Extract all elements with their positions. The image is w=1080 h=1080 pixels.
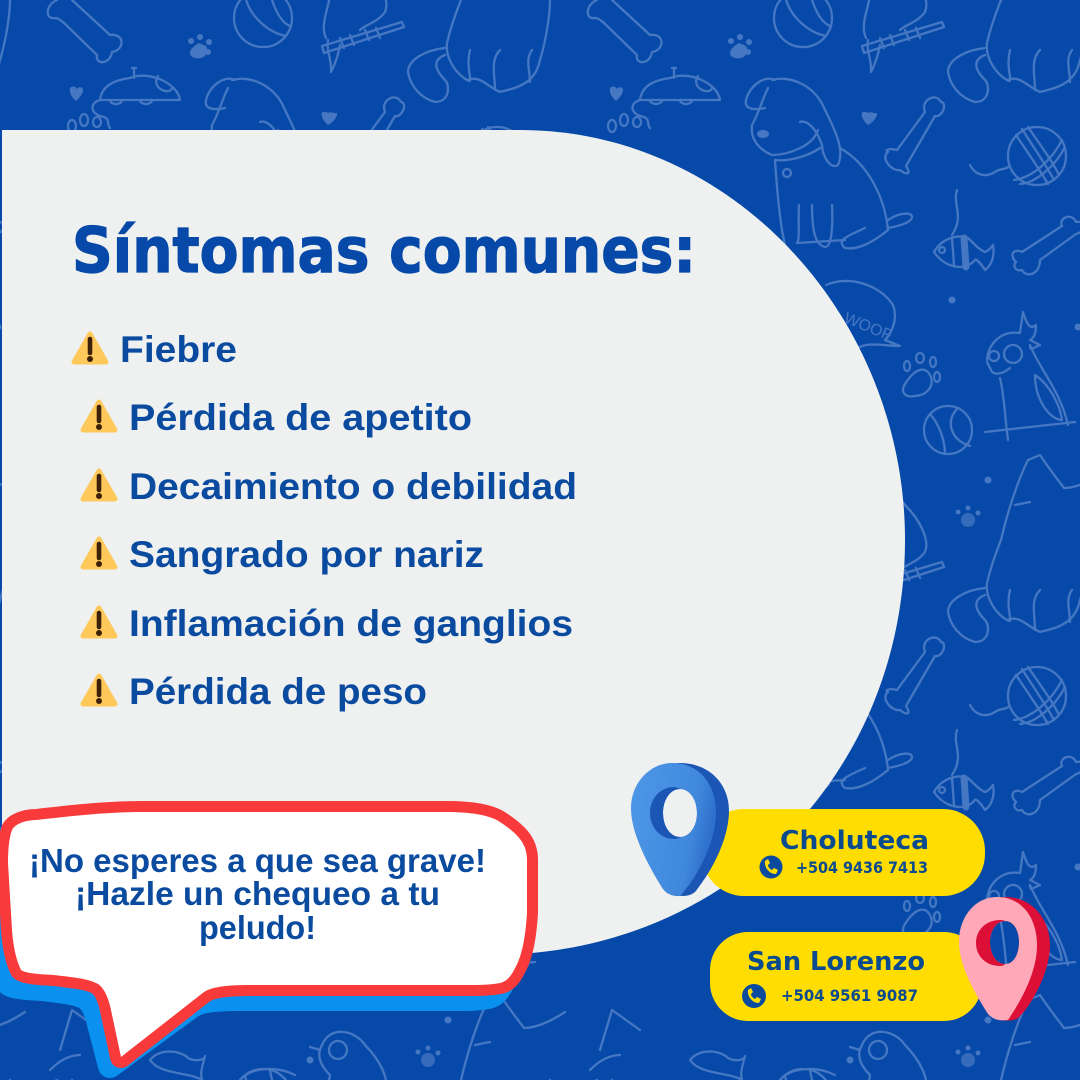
item: Fiebre: Fiebre [120,329,237,370]
icon: blue map pin [631,763,729,896]
contact pill: San Lorenzo: +504 9561 9087 [781,986,918,1005]
callout text [29,842,486,946]
contact pill: San Lorenzo [710,932,982,1021]
panel: symptoms card [2,130,905,955]
callout text: peludo! [199,909,316,946]
callout text: ¡No esperes a que sea grave! [29,842,486,879]
symptom list [74,329,577,712]
icon: phone [742,984,766,1008]
contact pill: San Lorenzo: San Lorenzo [747,947,925,977]
icon: phone [760,856,782,878]
item: Pérdida de apetito: Pérdida de apetito [129,397,472,438]
contact pill: Choluteca: +504 9436 7413 [796,858,928,877]
item: Sangrado por nariz: Sangrado por nariz [129,534,484,575]
callout text: ¡Hazle un chequeo a tu [75,875,440,912]
item: Fiebre [74,329,237,370]
title: Síntomas comunes: [72,214,696,287]
contact pill: Choluteca [702,809,985,896]
item: Decaimiento o debilidad: Decaimiento o debilidad [129,466,577,507]
callout: speech bubble [0,812,527,1066]
item: Inflamación de ganglios: Inflamación de ganglios [129,603,573,644]
item: Pérdida de peso: Pérdida de peso [129,671,427,712]
icon: pink map pin [959,897,1050,1021]
contact pill: Choluteca: Choluteca [780,826,929,856]
